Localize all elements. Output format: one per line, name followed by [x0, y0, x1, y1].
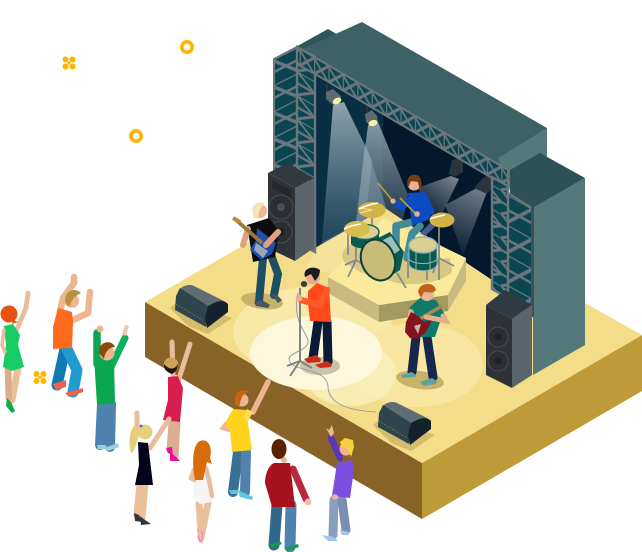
- person: orange shirt man: [53, 277, 90, 397]
- right guitarist: [395, 284, 447, 392]
- bass drum: [368, 232, 404, 279]
- torso: [308, 283, 331, 322]
- drumsticks: [378, 183, 415, 213]
- main roof box top: [300, 22, 547, 169]
- stool: [420, 220, 437, 236]
- left towers and trusses: [274, 47, 508, 252]
- right tower top: [510, 153, 585, 208]
- shoes: [401, 372, 437, 386]
- right front truss: [492, 177, 508, 298]
- top beam truss: [297, 47, 508, 188]
- left speaker: [268, 163, 314, 261]
- arm: [410, 312, 411, 325]
- blonde guitarist: [233, 203, 284, 312]
- stage platform: [145, 208, 642, 519]
- left front truss: [297, 47, 315, 252]
- arm right: [266, 232, 278, 245]
- legs: [396, 222, 412, 246]
- head: [408, 178, 420, 190]
- person: green dress woman: [0, 293, 28, 413]
- rear stage structure: [274, 22, 547, 300]
- person: red dress woman: [163, 342, 190, 461]
- person: yellow shirt man: [223, 382, 268, 500]
- mic cable: [289, 293, 376, 412]
- light pools: [233, 222, 483, 407]
- ring sparkle top: [182, 42, 192, 52]
- head: [253, 204, 267, 218]
- head: [420, 287, 434, 301]
- ring sparkle middle: [131, 131, 141, 141]
- speakers and monitors: [170, 163, 532, 451]
- cymbals: [358, 202, 386, 218]
- person: black dress blonde woman: [130, 413, 169, 525]
- right side truss: [508, 193, 532, 306]
- legs: [313, 322, 328, 362]
- left side truss: [274, 47, 297, 175]
- mic stand: [287, 288, 312, 376]
- person: red sweater man: [265, 439, 311, 551]
- shoes: [254, 293, 282, 308]
- person: white dress woman: [191, 440, 213, 544]
- arm: [301, 290, 327, 305]
- singer with microphone: [287, 268, 376, 412]
- legs: [259, 255, 278, 302]
- right speaker: [486, 290, 532, 388]
- cross sparkle lower: [34, 371, 46, 384]
- front monitor: [373, 402, 435, 451]
- right tower: [492, 153, 585, 375]
- torso: [247, 218, 279, 262]
- decorative sparkles: [34, 42, 192, 384]
- guitar: [250, 228, 276, 260]
- stage top: [145, 208, 642, 463]
- legs: [412, 337, 433, 377]
- guitar: [418, 306, 442, 320]
- stage left face: [145, 302, 422, 519]
- microphone: [301, 281, 307, 287]
- left back roof: [274, 29, 340, 62]
- backdrop: [314, 72, 383, 300]
- cross sparkle top: [62, 56, 76, 70]
- arm: [426, 316, 446, 321]
- shoes: [304, 355, 332, 368]
- crowd: [0, 277, 354, 551]
- arm left: [243, 229, 248, 245]
- drum kit: [344, 202, 454, 288]
- stage lights: [326, 85, 497, 194]
- person: purple shirt man: [322, 425, 354, 541]
- right tower face: [533, 178, 585, 375]
- drum riser: [328, 218, 466, 322]
- spotlight beams: [322, 102, 487, 255]
- drummer: [378, 175, 437, 258]
- person: green sweater man: [94, 325, 129, 451]
- stage right face: [422, 335, 642, 519]
- torso: [410, 298, 447, 337]
- main roof box side: [498, 128, 547, 190]
- stands: [345, 212, 454, 288]
- left monitor: [170, 285, 232, 334]
- head: [306, 270, 320, 284]
- floor tom: [409, 246, 437, 271]
- arms: [394, 197, 432, 213]
- torso: [408, 192, 433, 225]
- tom drum: [351, 232, 379, 248]
